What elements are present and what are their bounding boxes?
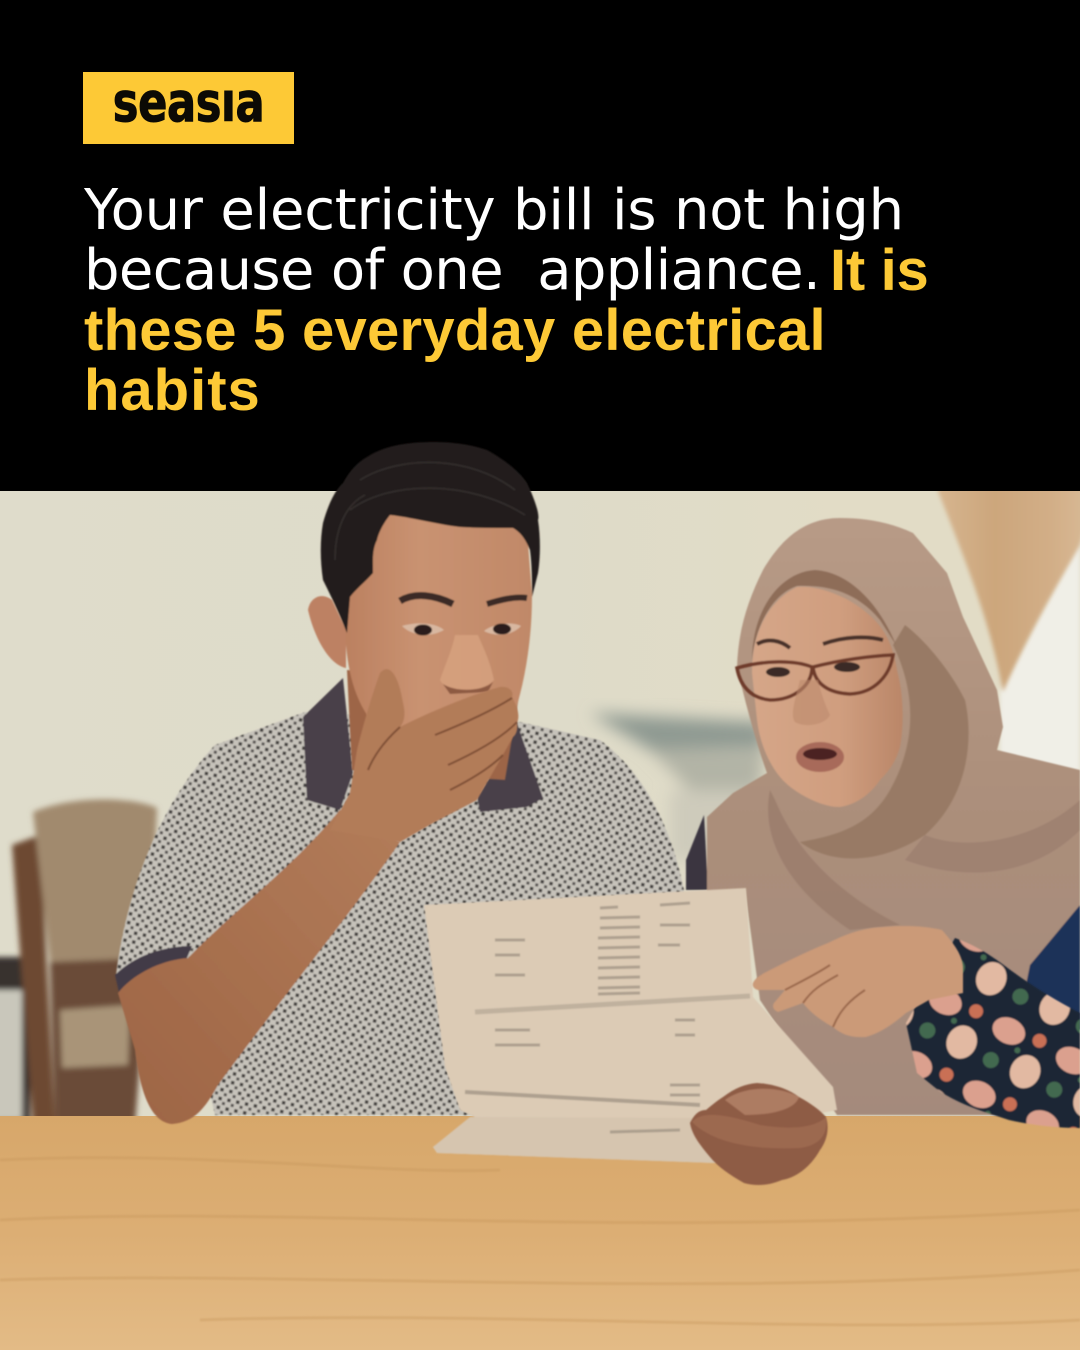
table: wood grain [0,1158,1080,1325]
photo: couple reading an electricity bill [0,442,1080,1350]
woman: brows and eyes [757,641,790,648]
man: hair strands [335,462,525,560]
man: neck and head [308,442,540,780]
headline: these 5 everyday electrical [84,298,826,363]
man: hair [321,442,540,633]
man: brows and eyes [400,596,453,604]
woman: scarf folds [800,625,969,858]
bill: printed lines [465,903,750,1132]
logo: seasia [83,72,294,144]
man: shirt [115,678,690,1124]
background: window light [1000,540,1080,790]
man: hand holding bill [690,1083,828,1185]
logo: seasia: seasia [113,72,264,134]
background: armchair [0,799,157,1127]
man: nose [440,635,494,690]
man: sleeve trim [115,946,192,997]
headline: It is [830,238,928,302]
headline: Your electricity bill is not high [84,178,904,242]
bill: paper [424,888,837,1163]
woman: nose and mouth [793,680,830,725]
man: arm [118,810,400,1124]
headline: because of one appliance. [84,238,820,302]
background: blurred furniture [590,713,765,860]
woman: body and headscarf [686,518,1080,1115]
photo background: wall [0,491,1080,1131]
man: collar [303,678,353,810]
headline [84,178,928,423]
man: hand over mouth [330,669,518,842]
headline: habits [84,358,261,423]
background: curtain [938,470,1080,692]
table [0,1116,1080,1350]
woman: pointing hand [753,926,963,1037]
woman: face [737,587,903,807]
woman: sleeve [906,938,1080,1128]
woman: glasses [737,655,893,700]
